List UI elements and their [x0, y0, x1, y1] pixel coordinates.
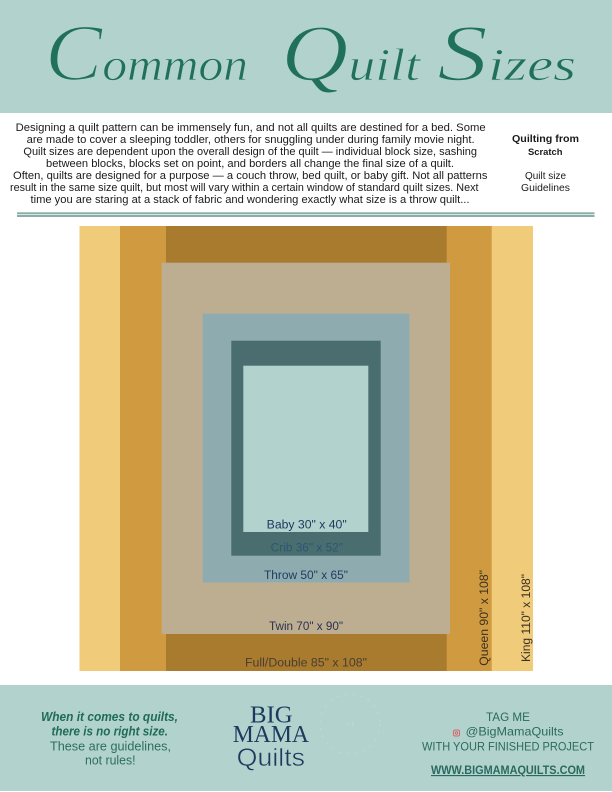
title: Common	[45, 10, 248, 98]
callout: no right size: not rules!	[85, 754, 136, 768]
social tag text: WITH YOUR FINISHED PROJECT	[422, 740, 595, 754]
label: baby: Baby 30" x 40"	[267, 519, 347, 531]
sidebar text: quilting from scratch: Guidelines	[521, 183, 570, 194]
baby size quilt	[243, 366, 368, 532]
logo: Big Mama Quilts: MAMA	[233, 722, 310, 748]
sidebar text: quilting from scratch: Scratch	[528, 147, 562, 157]
social tag text	[422, 710, 595, 777]
queen size quilt	[120, 226, 492, 671]
callout: no right size: These are guidelines,	[50, 740, 171, 754]
callout: no right size: there is no right size.	[52, 724, 168, 738]
logo: Big Mama Quilts: Quilts	[237, 744, 305, 772]
faint logo ornament	[320, 694, 380, 754]
title: Quilt	[281, 10, 421, 98]
twin size quilt	[162, 263, 450, 634]
label: throw: Throw 50" x 65"	[264, 570, 348, 582]
logo: Big Mama Quilts: BIG	[250, 703, 293, 729]
intro text block	[10, 122, 488, 206]
icon: instagram	[454, 730, 460, 736]
intro text block: Often, quilts are designed for a purpose — a couch throw, bed quilt, or baby gift. Not all patterns	[13, 170, 488, 182]
chart: nested quilt sizes	[80, 226, 533, 671]
sidebar text: quilting from scratch: Quilt size	[525, 171, 566, 182]
intro text block: time you are staring at a stack of fabric and wondering exactly what size is a throw quilt...	[30, 194, 470, 206]
title: Sizes	[437, 10, 576, 98]
logo: Big Mama Quilts	[233, 703, 310, 772]
intro text block: result in the same size quilt, but most will vary within a certain window of standard quilt sizes. Next	[10, 182, 478, 194]
callout: no right size: When it comes to quilts,	[41, 710, 178, 724]
social tag text: WWW.BIGMAMAQUILTS.COM	[431, 765, 585, 777]
label: crib: Crib 36" x 52"	[271, 543, 343, 555]
full/double size quilt	[166, 226, 447, 671]
king size quilt	[80, 226, 533, 671]
footer band	[0, 685, 612, 791]
intro text block: Quilt sizes are dependent upon the overall design of the quilt — individual block size, sashing	[23, 146, 477, 158]
intro text block: are made to cover a sleeping toddler, others for snuggling under during family movie night.	[27, 134, 475, 146]
sidebar text: quilting from scratch: Quilting from	[512, 134, 579, 145]
label: king: King 110" x 108"	[521, 574, 533, 662]
callout: no right size	[41, 710, 178, 768]
intro text block: Designing a quilt pattern can be immensely fun, and not all quilts are destined for a bed. Some	[16, 122, 486, 134]
crib size quilt	[231, 341, 381, 556]
label: queen: Queen 90" x 108"	[479, 570, 491, 666]
label: full/double: Full/Double 85" x 108"	[245, 658, 367, 670]
title	[45, 10, 576, 98]
header band	[0, 0, 612, 113]
intro text block: between blocks, blocks set on point, and borders all change the final size of a quilt.	[46, 158, 454, 170]
social tag text: TAG ME	[486, 710, 530, 724]
throw size quilt	[203, 314, 410, 582]
sidebar text: quilting from scratch	[512, 134, 579, 194]
social tag text: @BigMamaQuilts	[466, 724, 564, 738]
label: twin: Twin 70" x 90"	[269, 621, 343, 633]
